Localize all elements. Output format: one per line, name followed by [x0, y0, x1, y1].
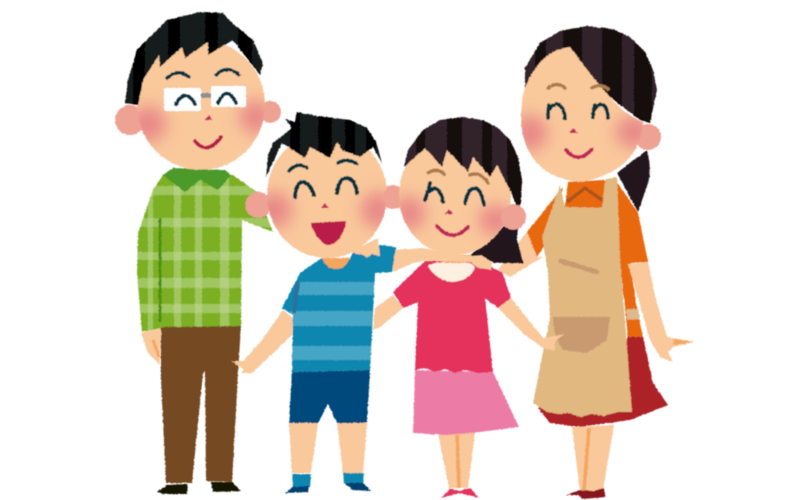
father hair [125, 12, 263, 105]
girl collar [428, 262, 475, 282]
boy left arm [231, 310, 293, 373]
mother collar chevron [567, 188, 602, 202]
father shirt [136, 174, 274, 332]
mother nose [569, 128, 578, 133]
boy legs [289, 423, 367, 473]
girl right ear over face [501, 205, 525, 229]
girl hair [404, 117, 522, 205]
boy cheeks [256, 192, 395, 228]
mother mouth [566, 149, 592, 157]
boy face [267, 132, 387, 258]
mother eyes [548, 104, 608, 119]
figure: boy [231, 110, 492, 493]
mother hair stripes [535, 20, 652, 125]
girl right arm [498, 298, 565, 351]
illustration: happy family of four [114, 11, 694, 500]
mother apron seam [561, 261, 597, 272]
boy shorts [289, 370, 370, 423]
father shoes [157, 482, 241, 494]
mother apron [533, 177, 632, 417]
boy hair stripes [290, 110, 376, 160]
father hair stripes [133, 5, 252, 110]
mother red skirt [538, 337, 668, 427]
mother apron pocket [553, 317, 610, 353]
mother left arm [498, 232, 543, 277]
mother cheeks [513, 115, 652, 151]
boy right arm and hand on girl's shoulder [392, 248, 492, 272]
boy eyes [295, 178, 357, 197]
boy shirt [280, 244, 400, 374]
mother legs [572, 425, 614, 492]
father pants [161, 326, 241, 483]
girl face [399, 135, 511, 255]
girl neck [440, 255, 472, 264]
girl mouth [437, 226, 468, 235]
father face [137, 40, 265, 170]
girl eyes [425, 183, 484, 205]
boy mouth [311, 221, 346, 245]
girl dress [393, 260, 511, 373]
girl shoes [441, 488, 479, 498]
father hand [141, 328, 161, 365]
mother brows [548, 84, 608, 89]
boy hair [266, 112, 382, 177]
boy neck [322, 258, 350, 269]
girl back hair [468, 200, 523, 263]
figure: girl [373, 200, 565, 498]
mother collar [565, 180, 605, 208]
shirt stripes [290, 282, 377, 360]
girl nose [445, 209, 453, 214]
figure: girl head [383, 110, 526, 255]
figure: father [115, 5, 281, 494]
girl legs [438, 432, 475, 488]
boy shoes [285, 483, 371, 493]
boy ears [245, 185, 405, 218]
mother ear [635, 124, 661, 150]
father ears [115, 101, 281, 135]
girl skirt [413, 370, 519, 435]
glasses bridge [201, 93, 211, 98]
father nose [205, 115, 213, 120]
girl brows [428, 170, 488, 183]
mother leg line [584, 428, 589, 490]
boy nose [321, 203, 329, 208]
father brows [167, 70, 239, 78]
girl leg line [457, 435, 459, 488]
father hand on boy shoulder [350, 238, 380, 258]
father mouth [195, 137, 221, 148]
mother orange blouse [527, 182, 648, 337]
mother hair base [525, 26, 657, 123]
figure: mother [498, 20, 695, 499]
mother face [521, 47, 643, 182]
shirt plaid [137, 178, 271, 330]
girl ears [383, 188, 526, 230]
boy socks [292, 473, 364, 487]
mother belt [626, 309, 640, 320]
father collar [163, 168, 231, 192]
father glasses [164, 86, 246, 111]
father thumb line [153, 340, 159, 357]
father cheeks [130, 100, 272, 142]
father eyes [176, 94, 236, 104]
girl cheeks [393, 196, 513, 235]
mother finger line [673, 339, 695, 345]
mother right arm [628, 262, 695, 362]
mother ponytail [617, 150, 650, 212]
boy brows [289, 160, 357, 171]
girl left arm [373, 295, 403, 330]
mother shoes [566, 488, 605, 499]
girl hair stripes [416, 110, 522, 205]
